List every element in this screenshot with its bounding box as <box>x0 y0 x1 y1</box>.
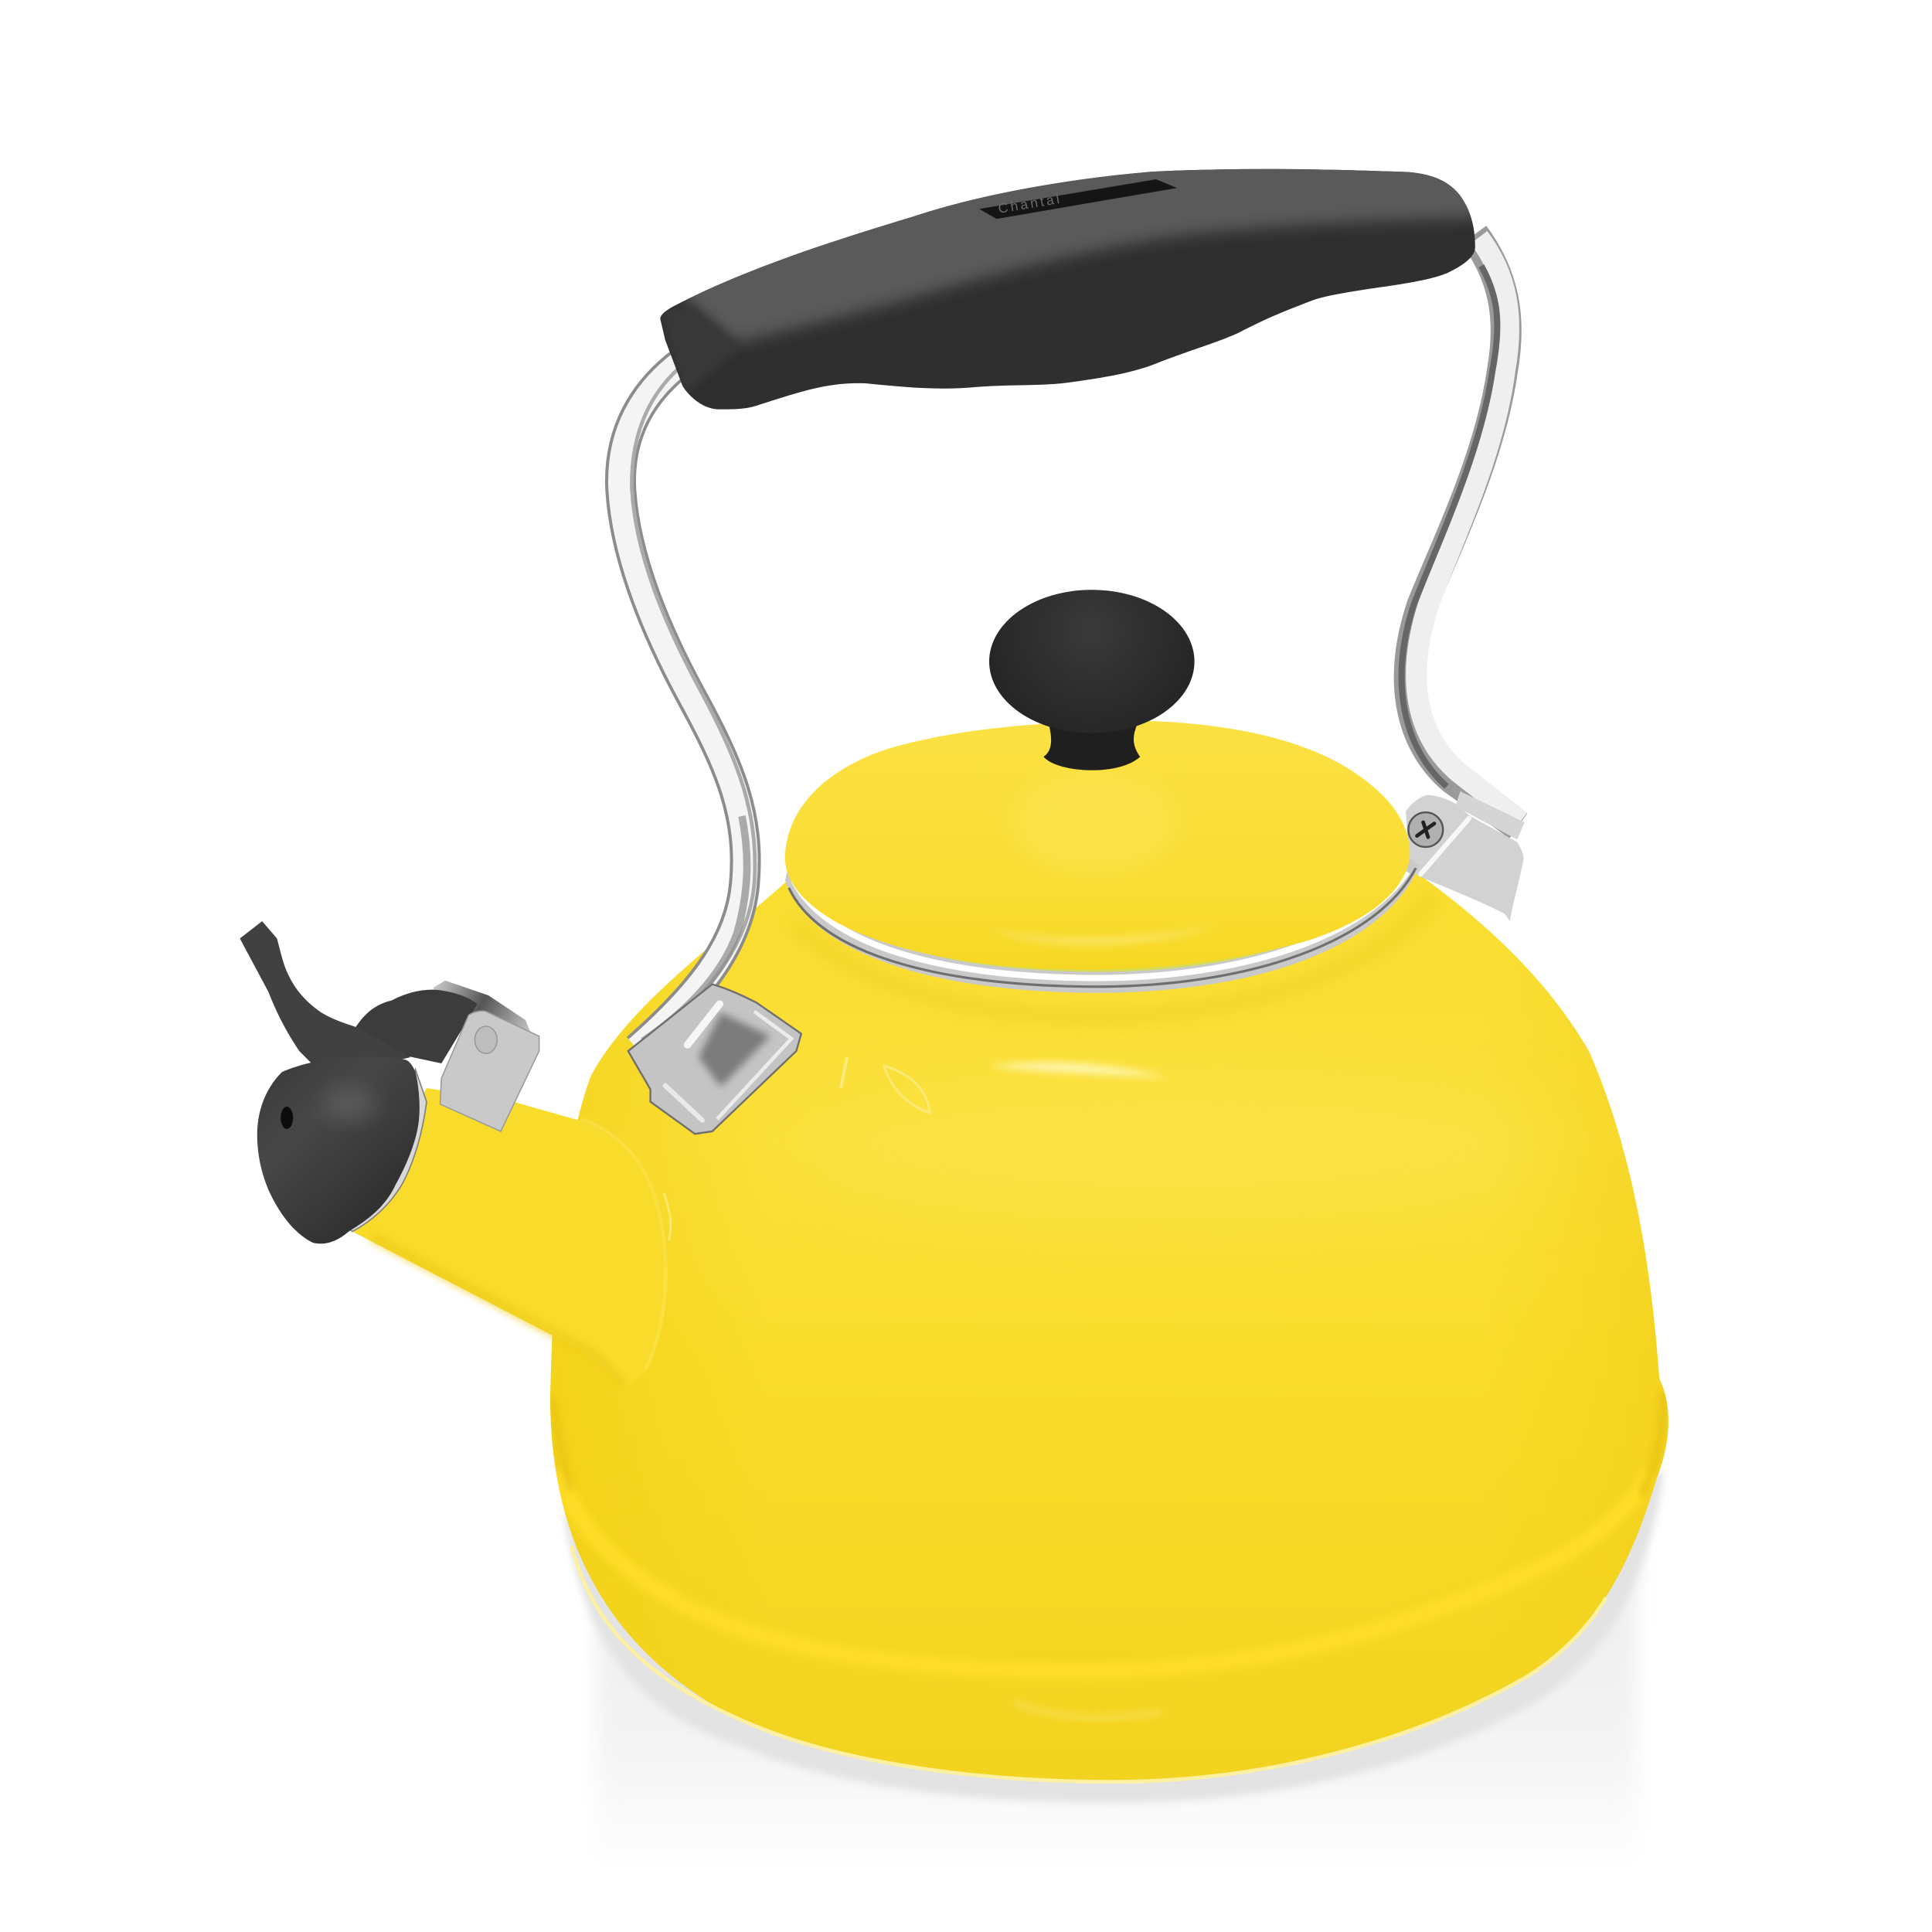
cap hinge disc <box>352 990 478 1063</box>
illustration: yellow enamel whistling kettle <box>240 168 1668 1807</box>
wire tip <box>1455 791 1525 839</box>
whistle cap <box>257 1056 427 1243</box>
rivet <box>474 1026 497 1053</box>
bracket bright crease <box>1420 818 1469 874</box>
clip back plate <box>433 981 534 1041</box>
lid highlight <box>1014 773 1175 872</box>
whistle lever <box>240 921 410 1078</box>
contact shadow <box>564 1471 1665 1803</box>
lid knob <box>989 590 1195 770</box>
lid <box>785 721 1410 970</box>
bracket shine <box>699 1012 770 1087</box>
body glints <box>841 1057 1168 1113</box>
handle wire: left <box>621 359 755 1049</box>
spout <box>352 1088 671 1387</box>
whistle clip: metal flap and hinge <box>352 981 539 1131</box>
grip upper lit face <box>660 148 1484 396</box>
base lip highlight <box>559 1471 1651 1672</box>
handle grip <box>660 148 1484 410</box>
chrome rim of cap <box>344 1070 427 1232</box>
faint bottom glint <box>1014 1702 1162 1718</box>
kettle body <box>544 866 1682 1793</box>
side shading <box>550 951 709 1702</box>
lid bottom sheen <box>989 925 1218 945</box>
shadow under lid rim <box>951 900 1430 1019</box>
clip front plate <box>440 1011 539 1131</box>
logo plate: Chantal <box>997 191 1063 216</box>
right handle bracket <box>1406 791 1525 921</box>
pale bottom edge <box>571 1546 1606 1782</box>
handle wire: right <box>1402 235 1521 826</box>
base lip crease shadow <box>553 1397 571 1490</box>
left handle bracket <box>628 985 801 1134</box>
phillips screw <box>1408 812 1443 847</box>
reflection below kettle <box>596 1546 1637 1873</box>
logo plate <box>979 179 1177 219</box>
glow on shoulder <box>876 1098 1473 1213</box>
whistle hole <box>281 1107 293 1129</box>
cap highlight <box>323 1087 377 1121</box>
lid rim: chrome band <box>785 853 1420 993</box>
